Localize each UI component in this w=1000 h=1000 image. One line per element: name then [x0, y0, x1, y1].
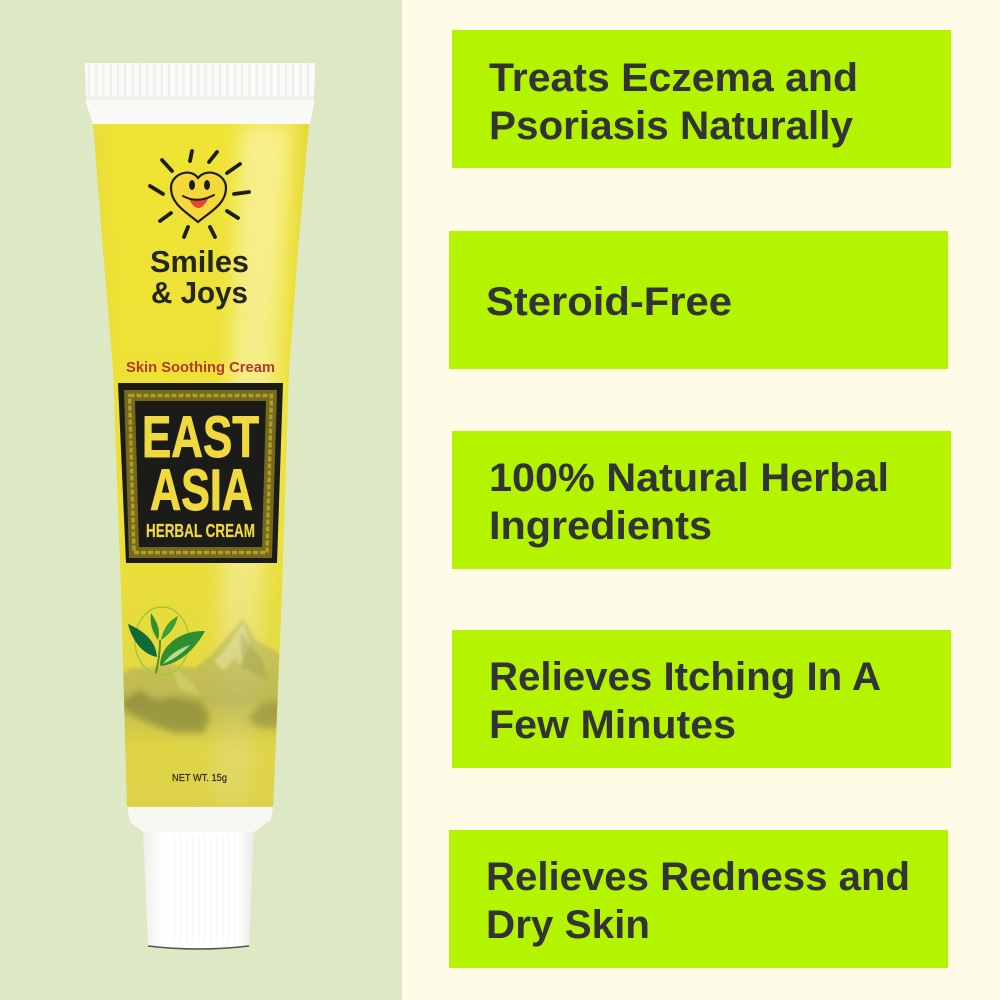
mountains scenery [123, 618, 280, 742]
tube cap [143, 832, 254, 949]
benefit card 4: Relieves Itching In A [489, 655, 881, 699]
benefit card 3 [452, 431, 951, 569]
benefit card 4: Few Minutes [489, 703, 736, 747]
benefit card 1: Psoriasis Naturally [489, 104, 854, 148]
label box: East Asia Herbal Cream: HERBAL CREAM [146, 521, 255, 541]
benefit card 5: Dry Skin [486, 903, 650, 947]
benefit card 2: Steroid-Free [486, 280, 732, 324]
left background panel [0, 0, 402, 1000]
benefit card 1: Treats Eczema and [489, 56, 858, 100]
benefit card 4 [452, 630, 951, 768]
net weight: NET WT. 15g [172, 773, 227, 784]
benefit card 3: Ingredients [489, 504, 712, 548]
benefit card 3: 100% Natural Herbal [489, 456, 889, 500]
tube yellow body [90, 124, 312, 808]
tube crimp seal [85, 63, 315, 124]
label box: East Asia Herbal Cream [118, 383, 283, 563]
tea leaf icon [128, 607, 205, 675]
product tube illustration [85, 63, 315, 950]
tube shoulder collar [127, 807, 273, 832]
benefit card 2 [449, 231, 948, 369]
brand name [150, 244, 249, 310]
benefit card 5: Relieves Redness and [486, 855, 910, 899]
product descriptor: Skin Soothing Cream [126, 359, 275, 376]
benefit card 5 [449, 830, 948, 968]
label box: East Asia Herbal Cream: EAST [142, 405, 259, 470]
brand name: Smiles [150, 244, 249, 279]
benefit card 1 [452, 30, 951, 168]
logo: smiling heart sun [150, 151, 249, 237]
label box: East Asia Herbal Cream: ASIA [150, 458, 253, 523]
brand name: & Joys [151, 275, 248, 310]
